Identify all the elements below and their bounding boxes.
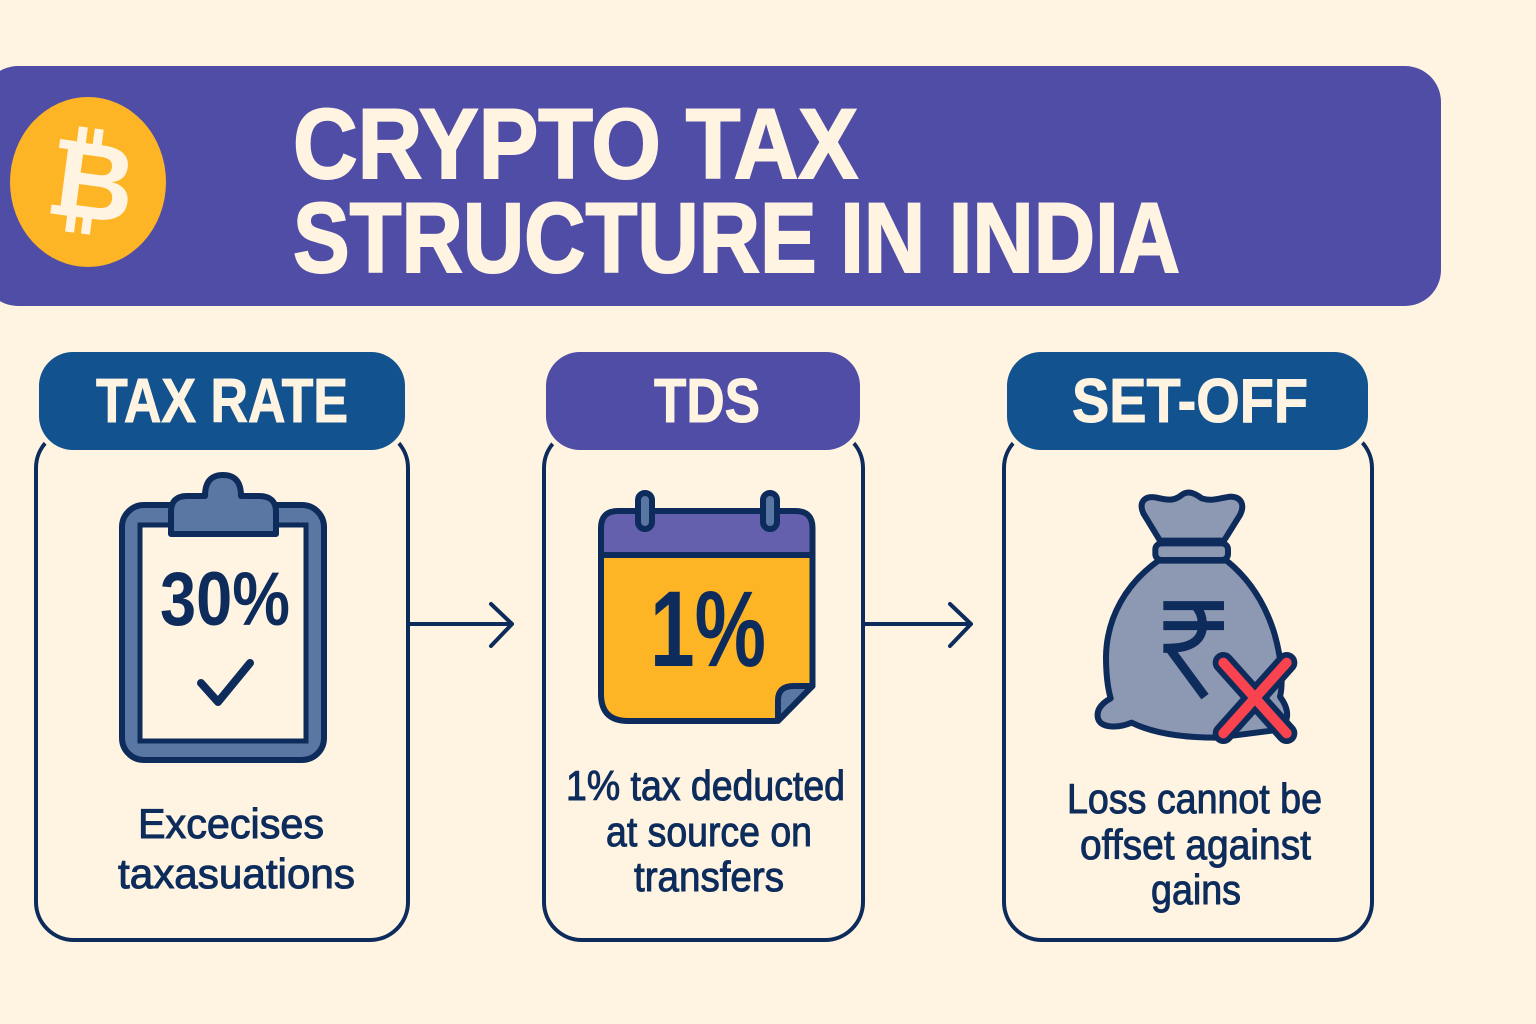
text: tax rate description: Excecises (138, 800, 324, 847)
arrow: tax rate to tds (409, 604, 512, 646)
text: tds description: 1% tax deducted (566, 762, 845, 809)
text: set-off description: offset against (1080, 821, 1311, 868)
icon: bitcoin coin: B (49, 116, 142, 247)
heading pill: set-off (1007, 352, 1368, 450)
text: tax rate description: taxasuations (118, 850, 355, 897)
text: tds description: transfers (634, 853, 784, 900)
heading pill: tax rate: TAX RATE (96, 367, 348, 436)
text: set-off description: Loss cannot be (1067, 775, 1322, 822)
text: tds description (566, 762, 845, 900)
icon: clipboard 30%: 30% (160, 557, 290, 642)
icon: calendar 1%: 1% (650, 568, 766, 689)
text: tds description: at source on (606, 808, 812, 855)
heading pill: tds (546, 352, 860, 450)
panel: tax rate (36, 352, 408, 940)
heading pill: tds: TDS (654, 367, 760, 436)
title (293, 88, 1180, 293)
heading pill: tax rate (39, 352, 405, 450)
panel: set-off (1004, 352, 1372, 940)
icon: calendar 1% (601, 493, 812, 721)
text: set-off description (1067, 775, 1322, 913)
icon: bitcoin coin (10, 97, 166, 267)
header banner (0, 66, 1441, 306)
text: set-off description: gains (1151, 866, 1241, 913)
title: STRUCTURE IN INDIA (293, 182, 1180, 293)
heading pill: set-off: SET-OFF (1072, 367, 1308, 436)
panel: tds (544, 352, 863, 940)
title: CRYPTO TAX (293, 88, 858, 199)
icon: clipboard 30% (122, 475, 324, 760)
arrow: tds to set-off (865, 604, 971, 646)
text: tax rate description (118, 800, 355, 897)
icon: money bag with red cross (1098, 493, 1287, 738)
